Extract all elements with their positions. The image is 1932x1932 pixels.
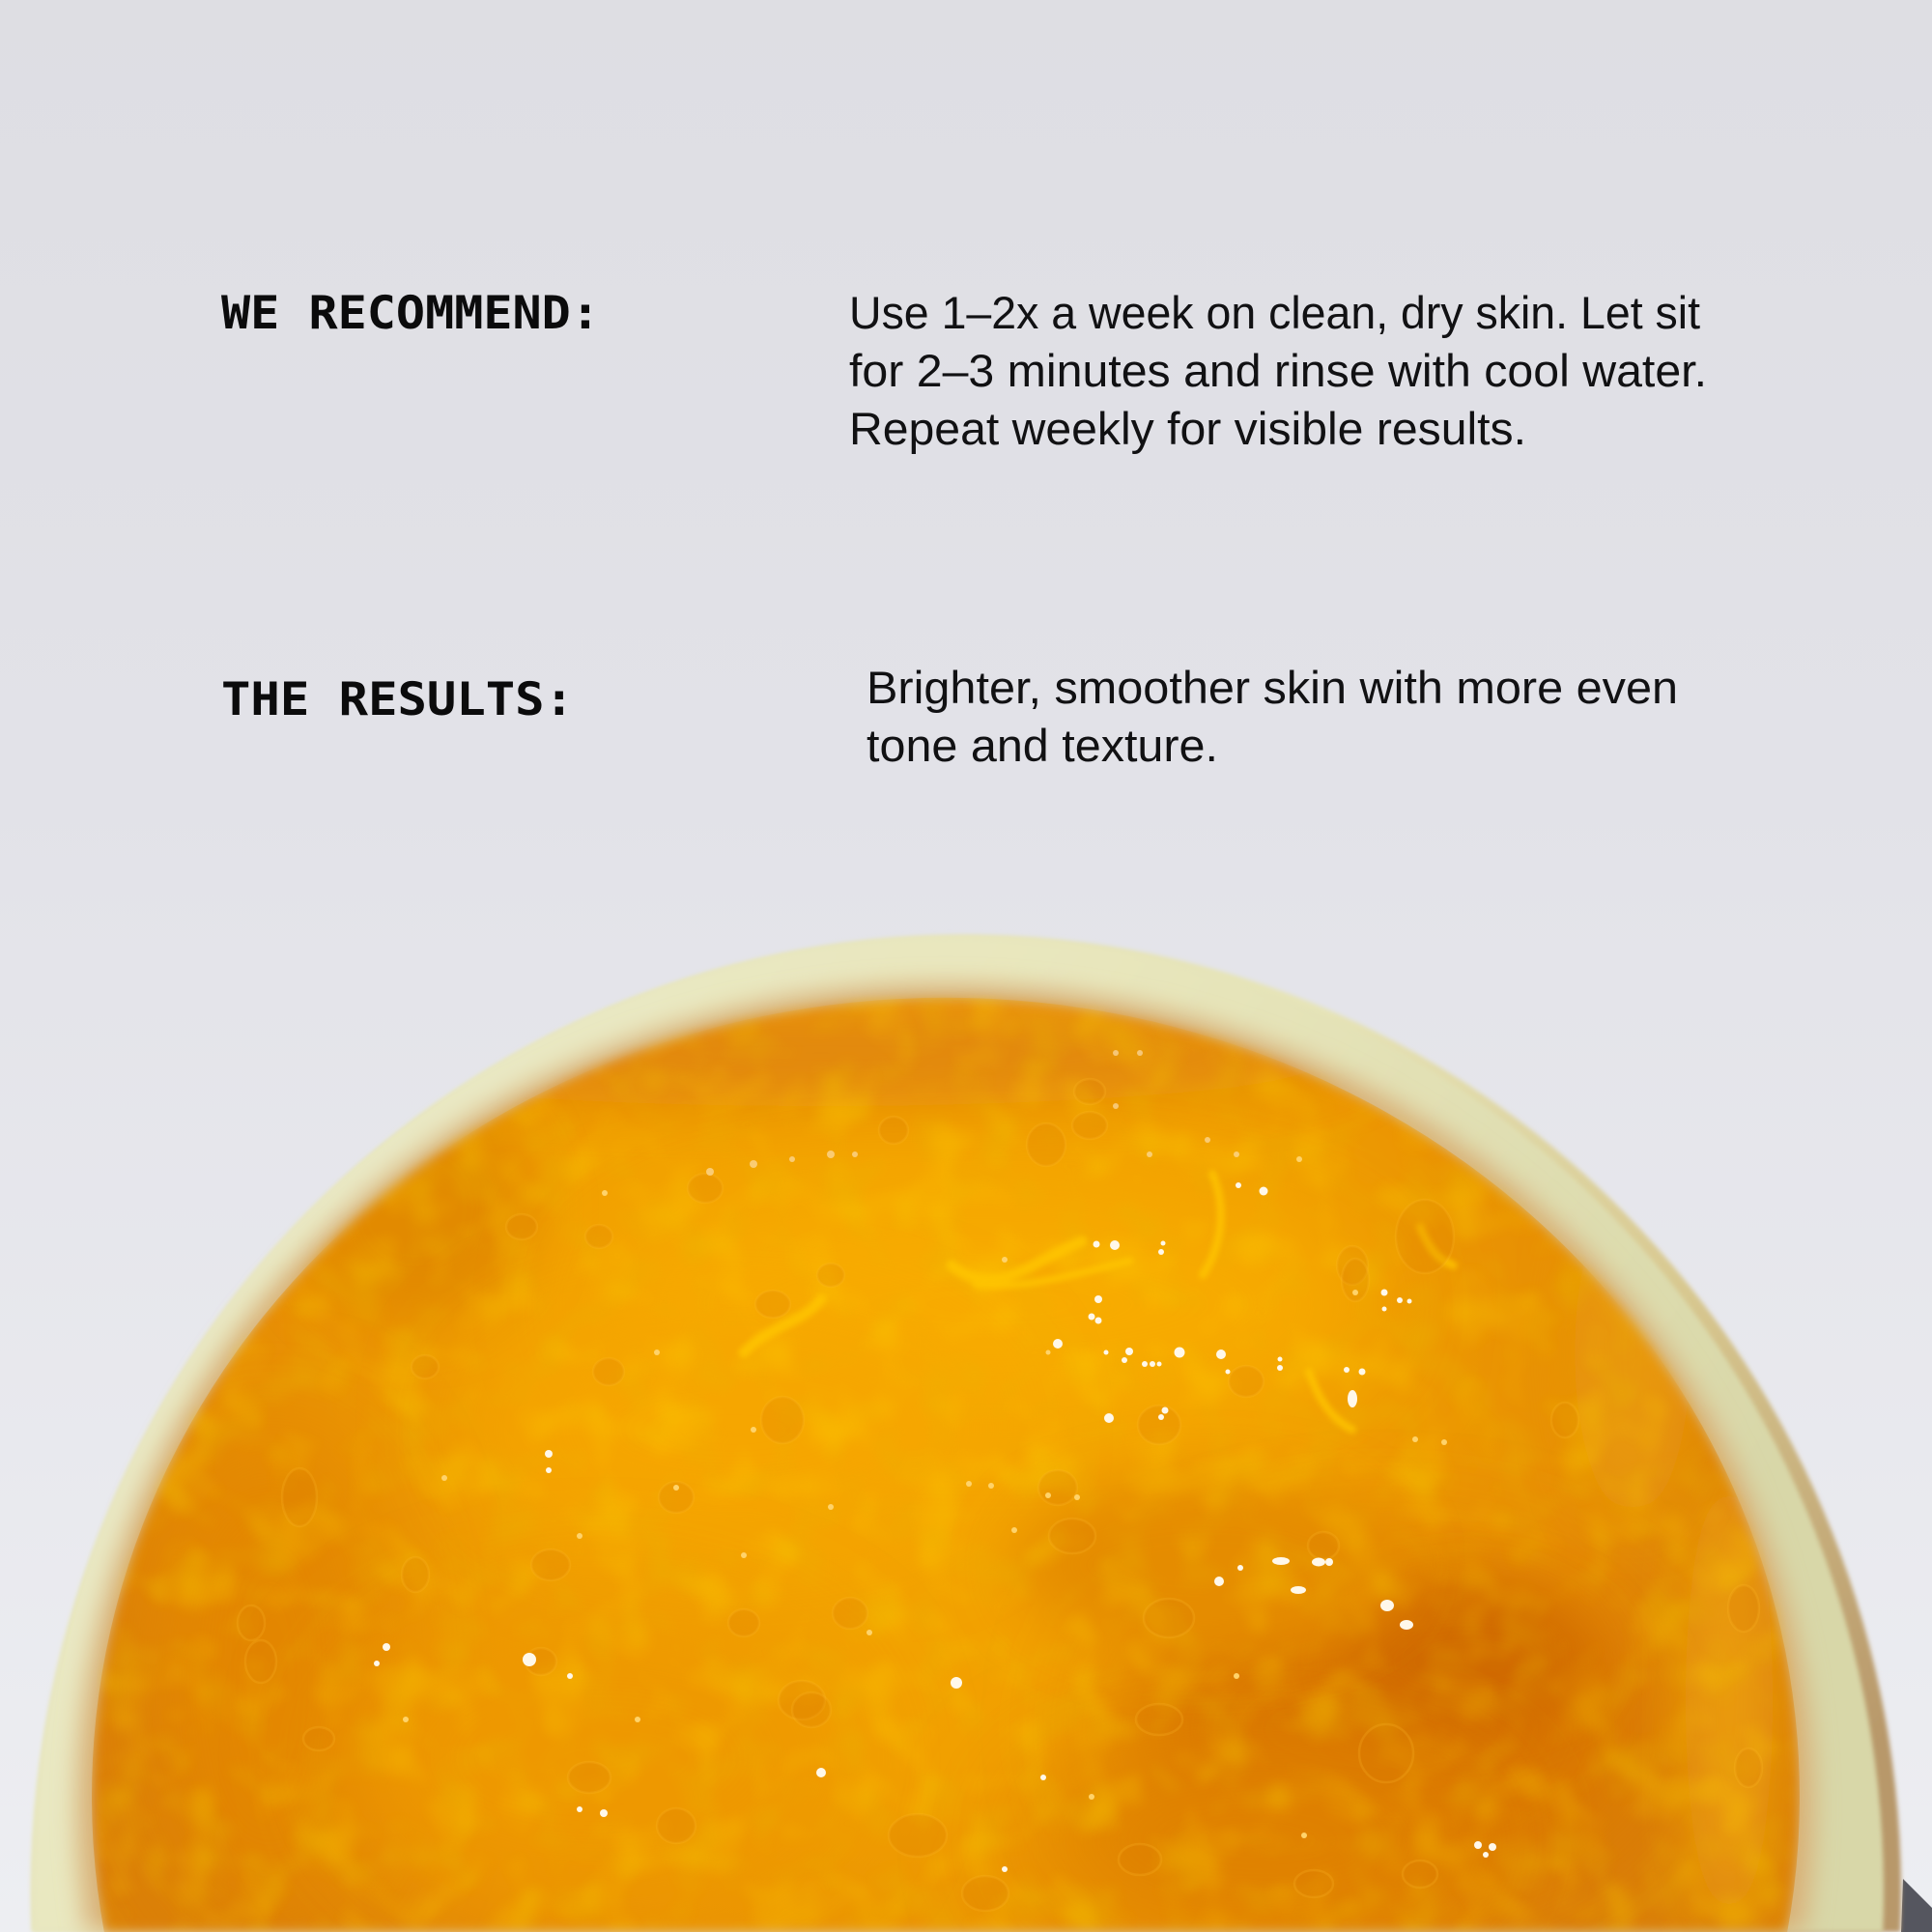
- faint top highlights: [706, 1050, 1239, 1176]
- gel tone patches: [155, 1000, 1773, 1927]
- amber glints: [403, 1156, 1447, 1838]
- dark object behind bowl: [1901, 1879, 1932, 1932]
- text block: results: [867, 662, 1678, 771]
- orange gel: [92, 995, 1800, 1932]
- bowl rim: [31, 935, 1901, 1932]
- text block: recommendation: Use 1–2x a week on clean, dry skin. Let sit: [849, 287, 1700, 338]
- yellow streaks: [744, 1174, 1454, 1430]
- text block: results: tone and texture.: [867, 720, 1218, 771]
- text block: results: Brighter, smoother skin with more even: [867, 662, 1678, 713]
- heading: the results: THE RESULTS:: [221, 673, 574, 726]
- product photo: bowl of orange gel: [31, 935, 1932, 1932]
- bubbles: [238, 1079, 1762, 1911]
- gel mottled texture: [97, 995, 1797, 1932]
- text block: recommendation: [849, 287, 1707, 454]
- specular highlights: [374, 1182, 1496, 1872]
- heading: we recommend: WE RECOMMEND:: [221, 287, 600, 340]
- text block: recommendation: for 2–3 minutes and rinse with cool water.: [849, 345, 1707, 396]
- text block: recommendation: Repeat weekly for visible results.: [849, 403, 1526, 454]
